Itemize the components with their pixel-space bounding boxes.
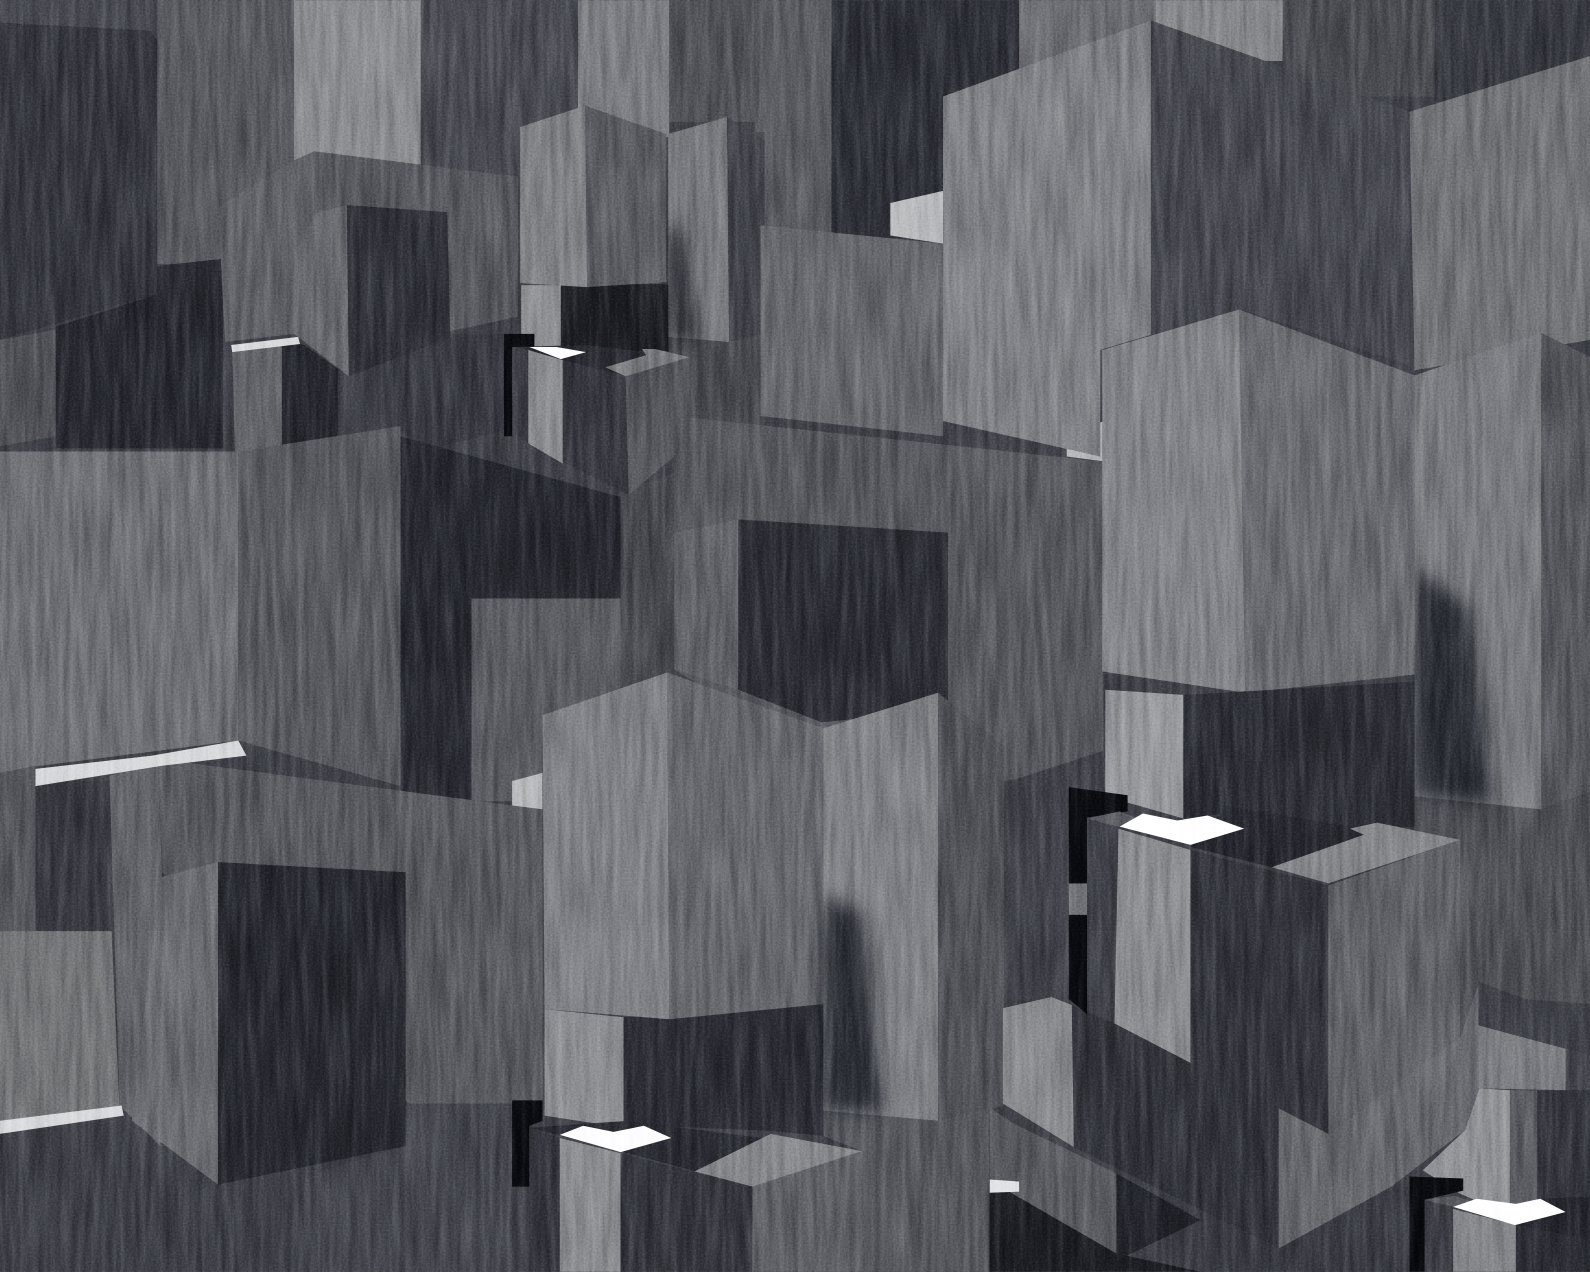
- block: large upper-right cube: [943, 20, 1410, 462]
- block: mid plank and big left block: [0, 426, 621, 801]
- block: ribbed panel: [761, 225, 943, 436]
- block: upper-centre small cube: [515, 345, 690, 495]
- block: upper-left cluster: [218, 151, 518, 471]
- block: far-right wall and tower: [1410, 56, 1590, 1004]
- block: lower-left block group: [0, 740, 543, 1272]
- block: top-left dark cube: [0, 23, 223, 448]
- block: bottom-right base: [990, 840, 1590, 1272]
- block: bottom-centre cube: [529, 1121, 862, 1272]
- block: central pair of towers: [512, 673, 1069, 1272]
- block: small upper cubes: [504, 106, 765, 436]
- block: centre wide block with inner dark cube: [472, 416, 1103, 809]
- background columns: [0, 0, 1590, 264]
- block: lower-right large cube: [1069, 787, 1460, 1134]
- block: bottom-right corner cube: [1425, 1196, 1590, 1272]
- block: right stacked cube: [1017, 309, 1415, 1009]
